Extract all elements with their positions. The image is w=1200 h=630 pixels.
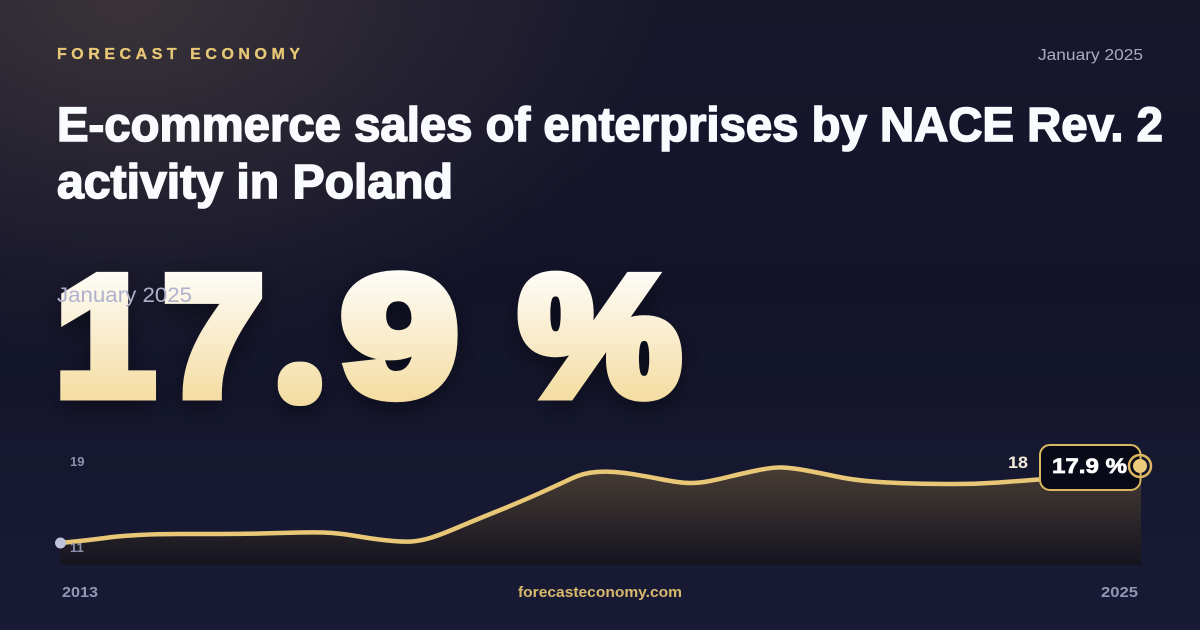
trend line bbox=[60, 467, 1045, 543]
year start: 2013 bbox=[62, 584, 98, 601]
label 18: 18 bbox=[1008, 453, 1028, 472]
value callout bbox=[1040, 445, 1140, 490]
date top right: January 2025 bbox=[1038, 47, 1143, 64]
big value: % bbox=[520, 242, 680, 430]
value callout: 17.9 % bbox=[1052, 455, 1127, 478]
axis max label: 19 bbox=[70, 454, 84, 469]
axis min label: 11 bbox=[70, 540, 84, 555]
year end: 2025 bbox=[1101, 584, 1138, 601]
date overlapping value: January 2025 bbox=[57, 284, 192, 307]
big value: . bbox=[296, 360, 304, 393]
area chart bbox=[55, 467, 1141, 565]
title: E-commerce sales of enterprises by NACE Rev. 2 bbox=[57, 99, 1163, 152]
area fill bbox=[60, 467, 1141, 565]
big value: 1 bbox=[56, 242, 154, 430]
title bbox=[57, 99, 1163, 209]
title: activity in Poland bbox=[57, 156, 453, 209]
brand label: FORECAST ECONOMY bbox=[57, 46, 300, 63]
start point bbox=[55, 538, 66, 548]
website: forecasteconomy.com bbox=[518, 584, 682, 601]
big value: 7 bbox=[164, 242, 263, 430]
big value: 9 bbox=[342, 242, 457, 430]
end marker bbox=[1129, 455, 1151, 477]
big value bbox=[56, 242, 680, 430]
